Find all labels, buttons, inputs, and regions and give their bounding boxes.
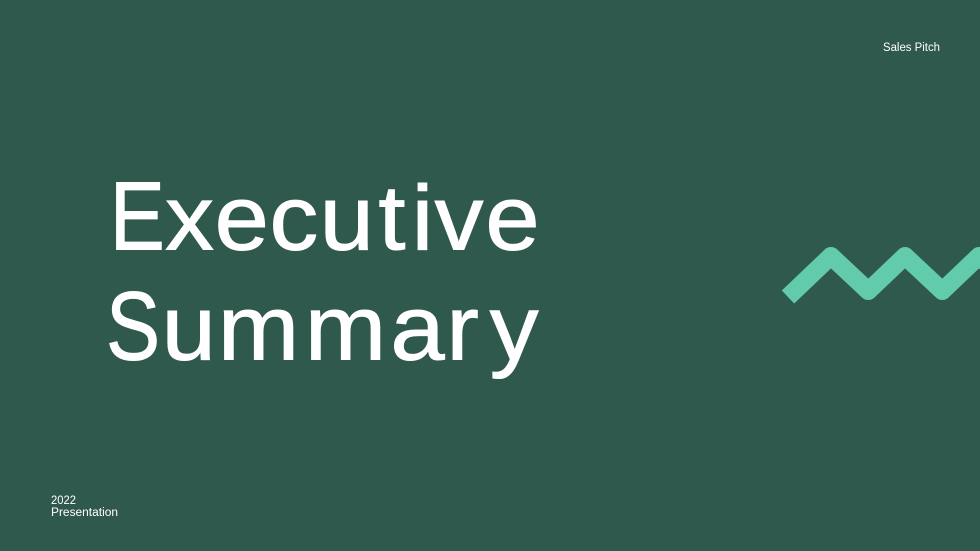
label: year and presentation: Presentation	[51, 507, 118, 519]
title: S	[106, 273, 160, 381]
title	[106, 163, 540, 381]
label: year and presentation	[51, 495, 118, 519]
icon: green zigzag line	[788, 256, 980, 297]
title: ummary	[162, 277, 539, 380]
title: xecutive	[165, 167, 540, 270]
label: year and presentation: 2022	[51, 495, 76, 507]
label: sales pitch: Sales Pitch	[883, 42, 940, 54]
title: E	[110, 163, 165, 271]
